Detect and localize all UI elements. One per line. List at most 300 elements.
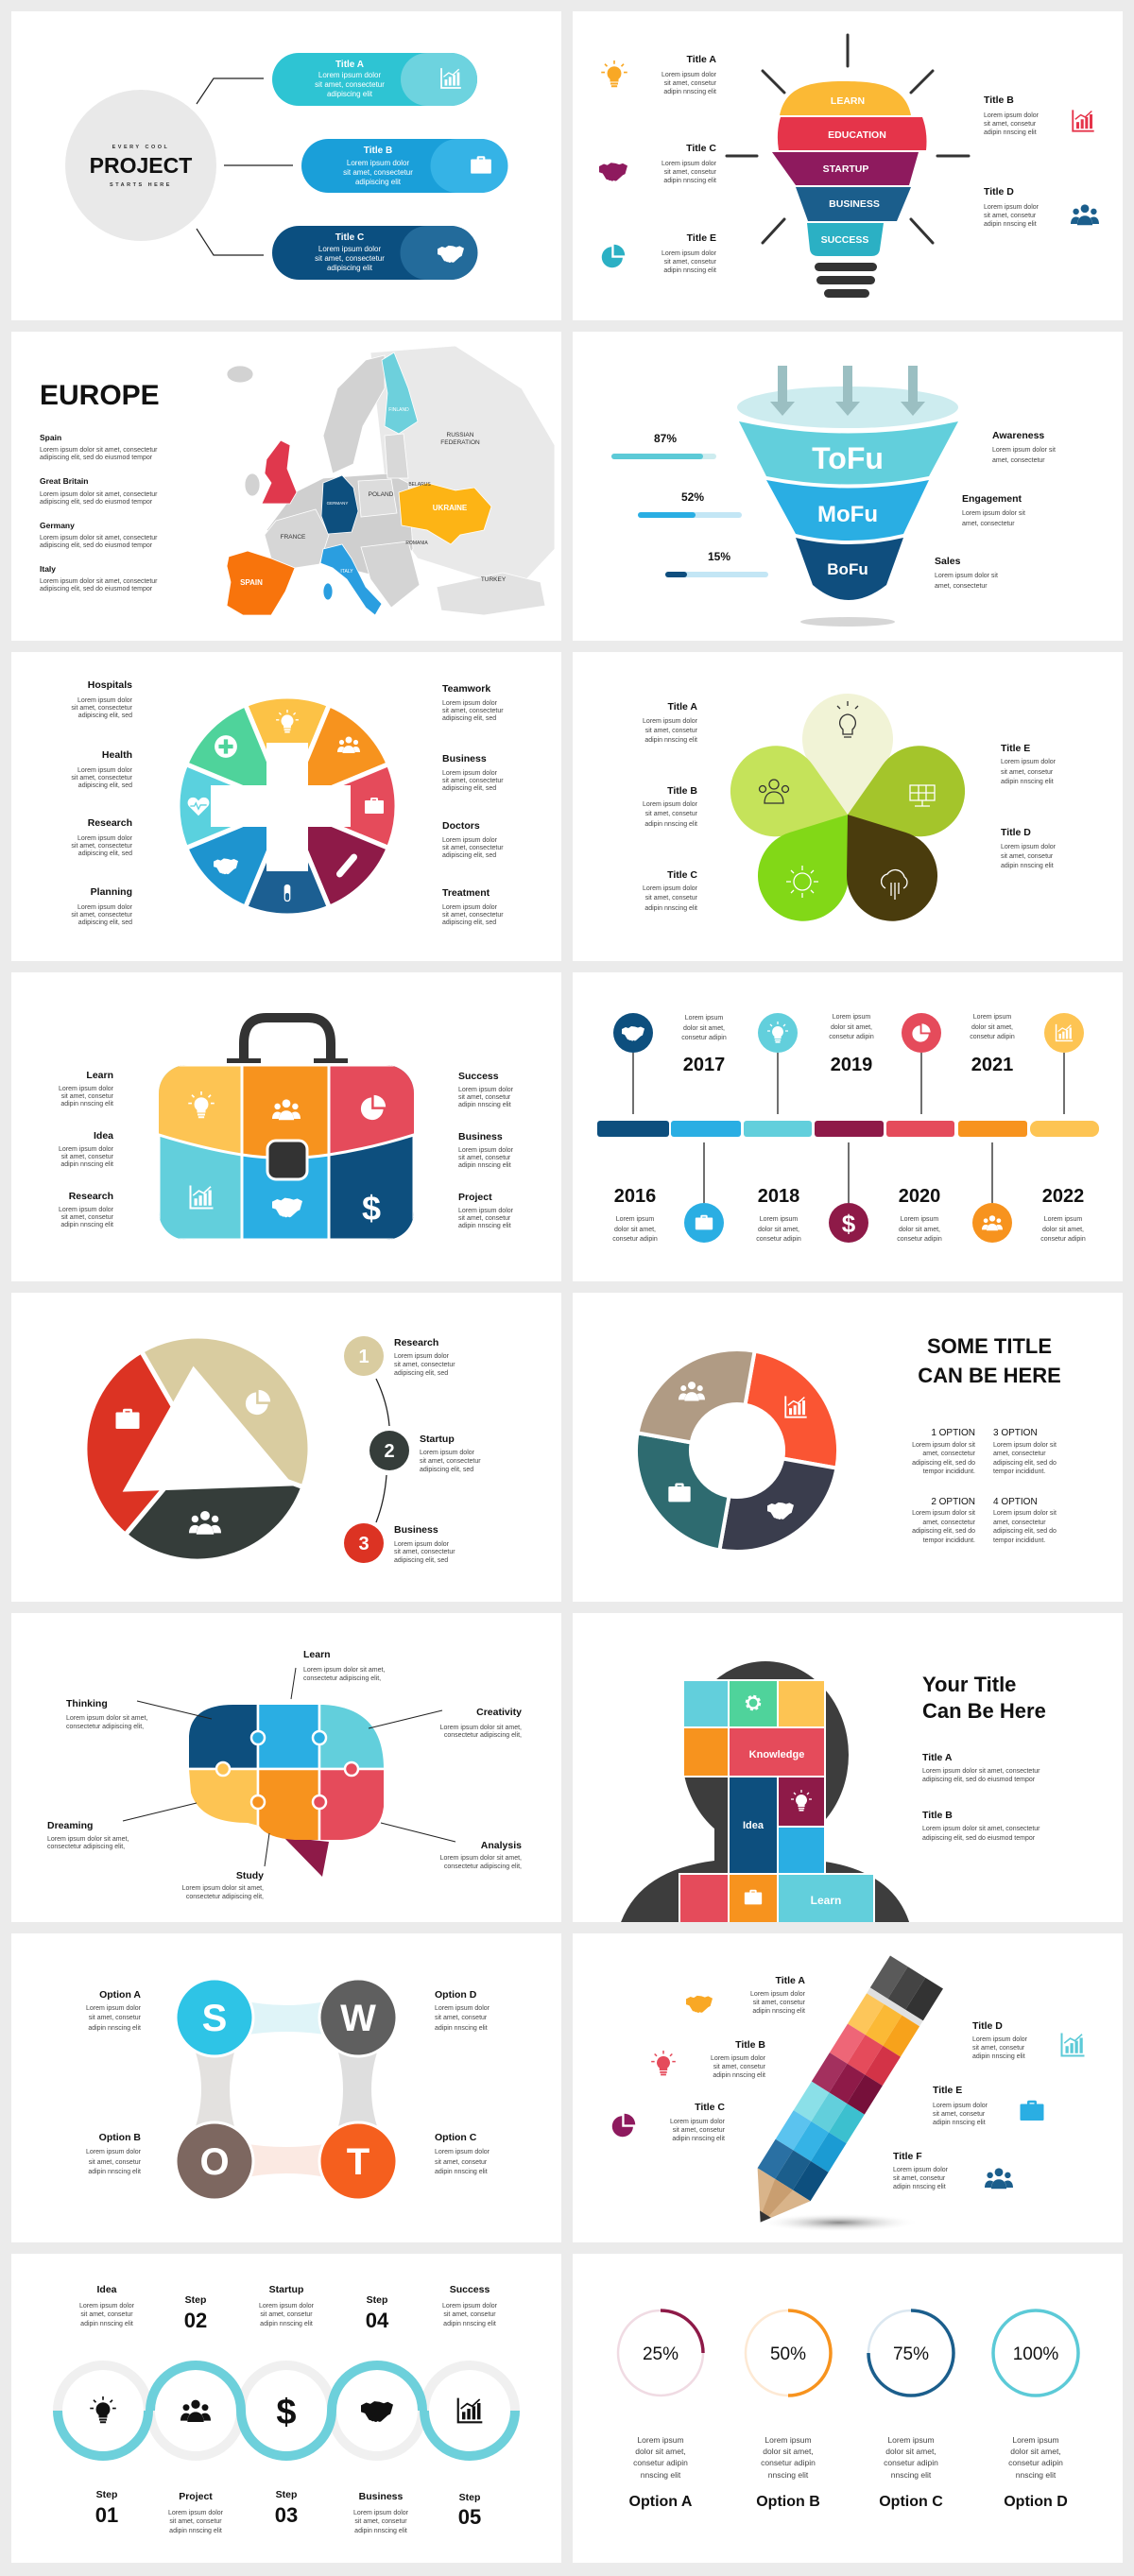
options: tempor incididunt.: [923, 1468, 975, 1475]
right labels: [458, 1071, 514, 1229]
options: amet, consectetur: [993, 1520, 1046, 1526]
options: Lorem ipsum dolor sit: [912, 1510, 975, 1517]
brain labels: Study: [236, 1870, 264, 1881]
timeline bar: [597, 1121, 1099, 1137]
options: amet, consectetur: [922, 1451, 976, 1457]
bottom step texts: 05: [458, 2505, 481, 2529]
option labels: sit amet, consetur: [89, 2015, 142, 2021]
pencil labels right: Title E: [933, 2085, 962, 2096]
option labels: [86, 1989, 490, 2175]
ring captions: Lorem ipsum: [1012, 2435, 1059, 2445]
map labels: ITALY: [340, 569, 353, 575]
right labels: Lorem ipsum dolor: [442, 904, 498, 911]
left labels: sit amet, consetur: [61, 1093, 114, 1100]
right labels: Lorem ipsum dolor: [1001, 759, 1057, 765]
map labels: ROMANIA: [405, 541, 428, 546]
icons: [599, 60, 1099, 267]
ring captions: consetur adipin: [633, 2458, 688, 2467]
pill: Title C: adipiscing elit: [327, 264, 373, 272]
right labels: Lorem ipsum dolor: [458, 1087, 514, 1093]
step labels: adipiscing elit, sed: [394, 1557, 448, 1564]
brain labels: consectetur adipiscing elit,: [303, 1675, 381, 1682]
ToFu: ToFu: [812, 441, 884, 475]
option labels: Lorem ipsum dolor: [435, 2149, 490, 2155]
option labels: adipin nnscing elit: [435, 2025, 488, 2032]
pill: Title A: Title A: [335, 60, 364, 70]
top years: dolor sit amet,: [831, 1024, 872, 1031]
percentage bars: [611, 432, 768, 577]
step rings: [58, 2365, 515, 2456]
puzzle icons and words: Learn: [811, 1894, 841, 1907]
brain labels: Lorem ipsum dolor sit amet,: [303, 1667, 385, 1674]
top step texts: adipin nnscing elit: [443, 2321, 496, 2327]
bottom step texts: 03: [275, 2503, 298, 2527]
options: Lorem ipsum dolor sit: [993, 1442, 1057, 1449]
brain labels: Lorem ipsum dolor sit amet,: [66, 1715, 147, 1722]
bulb layers: EDUCATION: [828, 129, 886, 141]
country text list: adipiscing elit, sed do eiusmod tempor: [40, 455, 153, 461]
pencil labels right: adipin nnscing elit: [972, 2053, 1025, 2060]
brain labels: Analysis: [481, 1840, 522, 1851]
left labels: Lorem ipsum dolor: [59, 1207, 114, 1213]
step labels: Startup: [420, 1434, 455, 1445]
map labels: SPAIN: [240, 578, 263, 587]
BoFu: [796, 538, 903, 600]
top step texts: Lorem ipsum dolor: [259, 2303, 315, 2310]
percentage bars: 52%: [681, 490, 704, 504]
pencil shadow: [759, 2213, 919, 2232]
right labels: Business: [442, 753, 487, 764]
bottom years: dolor sit amet,: [614, 1227, 656, 1233]
left labels: Idea: [94, 1130, 113, 1142]
options: Lorem ipsum dolor sit: [993, 1510, 1057, 1517]
bottom years: consetur adipin: [897, 1236, 942, 1243]
bottom step texts: Step: [276, 2489, 297, 2500]
panel: funnel: [573, 332, 1123, 641]
circle: every cool project: EVERY COOL: [112, 145, 169, 150]
right labels: sit amet, consetur: [458, 1155, 511, 1161]
option titles: Option C: [879, 2494, 943, 2510]
top step texts: sit amet, consetur: [443, 2311, 496, 2318]
title A/B text: Lorem ipsum dolor sit amet, consectetur: [922, 1826, 1040, 1832]
bottom step texts: Business: [359, 2491, 404, 2502]
title A/B text: Title A: [922, 1752, 953, 1763]
step labels: adipiscing elit, sed: [394, 1370, 448, 1377]
ring captions: nnscing elit: [1016, 2470, 1057, 2480]
top step texts: 04: [366, 2309, 389, 2332]
labels right: Lorem ipsum dolor: [984, 112, 1040, 119]
MoFu: [766, 480, 929, 541]
pill: Title C: Lorem ipsum dolor: [318, 245, 381, 253]
pencil labels left: Title A: [775, 1975, 805, 1986]
left labels: Lorem ipsum dolor: [643, 718, 698, 725]
top step texts: adipin nnscing elit: [260, 2321, 313, 2327]
step labels: Lorem ipsum dolor: [394, 1353, 450, 1360]
brain labels: Lorem ipsum dolor sit amet,: [47, 1836, 129, 1843]
panel: timeline: [573, 972, 1123, 1281]
labels left: Lorem ipsum dolor: [662, 72, 717, 78]
bottom years: 2018: [758, 1186, 799, 1207]
funnel labels: Lorem ipsum dolor sit: [935, 573, 998, 579]
pill: Title C: [272, 226, 478, 280]
pill: Title B: adipiscing elit: [355, 178, 402, 186]
SWOT circles: S: [202, 1998, 227, 2039]
pencil labels left: adipin nnscing elit: [713, 2072, 765, 2079]
bulb layers: BUSINESS: [829, 198, 880, 210]
ring icons: [188, 710, 384, 902]
map labels: UKRAINE: [433, 504, 468, 512]
left labels: Title A: [667, 701, 697, 713]
ring captions: Lorem ipsum: [887, 2435, 935, 2445]
ring 50%: 50%: [770, 2344, 806, 2364]
ring 50%: [746, 2310, 831, 2396]
SWOT circles: O: [199, 2141, 230, 2183]
top step texts: sit amet, consetur: [260, 2311, 313, 2318]
puzzle icons and words: Idea: [743, 1820, 765, 1831]
ring 25%: [618, 2310, 703, 2396]
pencil labels left: [670, 1975, 806, 2142]
bottom icon circles: [684, 1203, 1012, 1243]
left labels: Lorem ipsum dolor: [59, 1146, 114, 1153]
funnel shadow: [800, 617, 895, 627]
bottom years: dolor sit amet,: [1042, 1227, 1084, 1233]
left labels: Title B: [667, 785, 697, 797]
title A/B text: Title B: [922, 1810, 953, 1821]
left labels: [71, 679, 133, 926]
pill: Title A: adipiscing elit: [327, 90, 373, 98]
labels left: Title A: [686, 54, 716, 65]
pill: Title A: sit amet, consectetur: [315, 80, 385, 89]
pencil labels left: Lorem ipsum dolor: [750, 1991, 806, 1998]
left labels: Research: [88, 817, 132, 829]
map: [227, 346, 555, 615]
bottom step texts: adipin nnscing elit: [354, 2528, 407, 2534]
pencil labels left: sit amet, consetur: [753, 2000, 806, 2006]
panel: head puzzle: [573, 1613, 1123, 1922]
left labels: Research: [69, 1191, 113, 1202]
stems: [633, 1053, 1064, 1203]
bottom step texts: [95, 2489, 481, 2534]
connectors: [191, 1996, 382, 2183]
number badges: 3: [358, 1534, 369, 1554]
bulb rays: [727, 35, 969, 243]
labels right: [984, 94, 1040, 228]
left labels: sit amet, consetur: [645, 728, 698, 734]
top years: dolor sit amet,: [683, 1025, 725, 1032]
funnel labels: Sales: [935, 556, 961, 567]
bottom years: 2022: [1042, 1186, 1084, 1207]
step labels: sit amet, consectetur: [420, 1458, 481, 1465]
labels right: Title D: [984, 186, 1014, 197]
ring 75%: 75%: [893, 2344, 929, 2364]
ring 100%: [993, 2310, 1078, 2396]
left labels: [643, 701, 698, 912]
bulb layers: SUCCESS: [821, 234, 868, 246]
step labels: Business: [394, 1524, 438, 1536]
labels right: adipin nnscing elit: [984, 129, 1037, 136]
option labels: Option D: [435, 1989, 477, 2001]
bottom icon circles: $: [842, 1210, 856, 1238]
step labels: Lorem ipsum dolor: [420, 1450, 475, 1456]
top years: consetur adipin: [829, 1034, 874, 1040]
pill: Title B: sit amet, consectetur: [343, 168, 413, 177]
bulb layers: LEARN: [831, 95, 865, 107]
MoFu: MoFu: [817, 502, 878, 527]
map labels: FEDERATION: [440, 439, 480, 446]
puzzle pieces: [679, 1680, 874, 1926]
top years: Lorem ipsum: [685, 1015, 723, 1022]
left labels: adipin nnscing elit: [60, 1222, 113, 1228]
left labels: sit amet, consectetur: [71, 912, 133, 919]
ring captions: Lorem ipsum: [765, 2435, 812, 2445]
pencil labels left: Title B: [735, 2039, 765, 2051]
connectors: [197, 78, 293, 255]
panel: SWOT: [11, 1933, 561, 2242]
ring captions: [633, 2435, 1063, 2480]
number badges: 1: [358, 1347, 369, 1367]
brain labels: Dreaming: [47, 1820, 93, 1831]
right labels: Teamwork: [442, 683, 490, 695]
bottom step texts: sit amet, consetur: [354, 2518, 407, 2525]
bottom years: consetur adipin: [612, 1236, 658, 1243]
brain labels: Lorem ipsum dolor sit amet,: [182, 1885, 264, 1892]
left labels: adipin nnscing elit: [60, 1161, 113, 1168]
country text list: [40, 433, 158, 592]
bottom years: dolor sit amet,: [899, 1227, 940, 1233]
left labels: Lorem ipsum dolor: [643, 885, 698, 892]
right labels: adipin nnscing elit: [458, 1223, 511, 1229]
left labels: adipiscing elit, sed: [78, 782, 132, 789]
pencil labels left: Title C: [695, 2102, 725, 2113]
top step texts: Startup: [269, 2284, 303, 2295]
funnel labels: amet, consectetur: [935, 583, 988, 590]
ring captions: dolor sit amet,: [1010, 2447, 1061, 2456]
number badges: [344, 1336, 409, 1563]
bottom years: Lorem ipsum: [760, 1216, 798, 1223]
BoFu: BoFu: [827, 560, 868, 578]
circle: every cool project: STARTS HERE: [110, 182, 172, 188]
right labels: sit amet, consectetur: [442, 912, 504, 919]
brain labels: Lorem ipsum dolor sit amet,: [440, 1725, 522, 1731]
right labels: [1001, 743, 1057, 869]
head silhouette: [620, 1661, 910, 1925]
donut icons: [668, 1382, 807, 1520]
top years: Lorem ipsum: [833, 1014, 870, 1021]
circle: every cool project: [65, 90, 216, 241]
right labels: sit amet, consectetur: [442, 845, 504, 851]
labels left: sit amet, consetur: [664, 80, 717, 87]
map labels: FRANCE: [281, 534, 306, 541]
ring captions: consetur adipin: [761, 2458, 816, 2467]
ring captions: nnscing elit: [768, 2470, 809, 2480]
ring captions: consetur adipin: [884, 2458, 938, 2467]
options: amet, consectetur: [993, 1451, 1046, 1457]
option labels: Option B: [99, 2132, 141, 2143]
petal icons: [760, 701, 935, 900]
labels left: adipin nnscing elit: [663, 178, 716, 184]
ring captions: dolor sit amet,: [763, 2447, 814, 2456]
option labels: adipin nnscing elit: [435, 2169, 488, 2175]
labels left: Lorem ipsum dolor: [662, 161, 717, 167]
panel: medical ring: [11, 652, 561, 961]
country text list: Lorem ipsum dolor sit amet, consectetur: [40, 535, 158, 541]
percentage bars: 87%: [654, 432, 677, 445]
country text list: Germany: [40, 521, 75, 530]
pencil labels right: Title F: [893, 2151, 922, 2162]
pencil labels right: adipin nnscing elit: [933, 2120, 986, 2126]
top step texts: adipin nnscing elit: [80, 2321, 133, 2327]
pencil labels right: Lorem ipsum dolor: [893, 2167, 949, 2173]
bottom step texts: sit amet, consetur: [169, 2518, 222, 2525]
right labels: adipin nnscing elit: [458, 1162, 511, 1169]
labels left: [662, 54, 717, 274]
left labels: sit amet, consetur: [61, 1154, 114, 1160]
options: adipiscing elit, sed do: [912, 1528, 975, 1535]
right labels: adipin nnscing elit: [458, 1102, 511, 1108]
title A/B text: adipiscing elit, sed do eiusmod tempor: [922, 1835, 1036, 1842]
left labels: adipiscing elit, sed: [78, 713, 132, 719]
brain labels: Learn: [303, 1649, 331, 1660]
country text list: Spain: [40, 433, 61, 442]
title: [918, 1334, 1061, 1387]
panel: pencil: [573, 1933, 1123, 2242]
funnel labels: Lorem ipsum dolor sit: [992, 447, 1056, 454]
step labels: [394, 1337, 481, 1564]
options: 4 OPTION: [993, 1497, 1038, 1507]
country text list: Italy: [40, 564, 56, 574]
panel: project title pills: [11, 11, 561, 320]
pencil labels left: adipin nnscing elit: [672, 2136, 725, 2142]
pencil icons: [612, 1996, 1085, 2189]
country text list: adipiscing elit, sed do eiusmod tempor: [40, 586, 153, 592]
bottom years: 2016: [614, 1186, 656, 1207]
left labels: sit amet, consetur: [61, 1214, 114, 1221]
top step texts: Step: [367, 2294, 387, 2306]
option titles: Option A: [629, 2494, 693, 2510]
left labels: Title C: [667, 869, 697, 881]
left labels: Planning: [91, 886, 132, 898]
bulb layers: STARTUP: [823, 163, 868, 175]
option labels: sit amet, consetur: [435, 2015, 488, 2021]
pill: Title B: [301, 139, 508, 193]
title A/B text: adipiscing elit, sed do eiusmod tempor: [922, 1777, 1036, 1783]
right labels: sit amet, consectetur: [442, 708, 504, 714]
lock: [267, 1141, 307, 1179]
pencil labels left: Lorem ipsum dolor: [670, 2119, 726, 2125]
pencil labels right: sit amet, consetur: [893, 2175, 946, 2182]
map labels: FINLAND: [388, 407, 409, 413]
bottom years: Lorem ipsum: [1044, 1216, 1082, 1223]
bottom years: Lorem ipsum: [616, 1216, 654, 1223]
top icon circles: [613, 1013, 1084, 1053]
top step texts: Lorem ipsum dolor: [79, 2303, 135, 2310]
left labels: adipiscing elit, sed: [78, 919, 132, 926]
labels left: Title C: [686, 143, 716, 154]
top step texts: sit amet, consetur: [80, 2311, 133, 2318]
pill: Title B: Lorem ipsum dolor: [347, 159, 409, 167]
option labels: Lorem ipsum dolor: [435, 2005, 490, 2012]
step icons: [90, 2393, 482, 2432]
panel: Europe map: [11, 332, 561, 641]
pencil labels right: Title D: [972, 2020, 1003, 2032]
panel: three-part cycle: [11, 1293, 561, 1602]
pencil labels left: adipin nnscing elit: [752, 2008, 805, 2015]
ToFu: [739, 421, 958, 484]
pencil labels left: sit amet, consetur: [673, 2127, 726, 2134]
top step texts: Step: [185, 2294, 206, 2306]
ring captions: Lorem ipsum: [637, 2435, 684, 2445]
funnel labels: amet, consectetur: [962, 521, 1015, 527]
title A/B text: Lorem ipsum dolor sit amet, consectetur: [922, 1768, 1040, 1775]
left labels: Lorem ipsum dolor: [643, 801, 698, 808]
right labels: sit amet, consectetur: [442, 778, 504, 784]
option titles: Option D: [1004, 2494, 1068, 2510]
brain labels: Thinking: [66, 1698, 108, 1709]
left labels: Lorem ipsum dolor: [77, 904, 133, 911]
circle: every cool project: PROJECT: [90, 153, 192, 178]
connector arc: [376, 1379, 389, 1522]
pill: Title A: [272, 53, 477, 106]
labels left: adipin nnscing elit: [663, 267, 716, 274]
panel: briefcase: [11, 972, 561, 1281]
map labels: BELARUS: [408, 482, 431, 488]
map labels: [240, 407, 507, 587]
option labels: sit amet, consetur: [435, 2159, 488, 2166]
ring 25%: 25%: [643, 2344, 679, 2364]
left labels: sit amet, consectetur: [71, 705, 133, 712]
petals: [718, 694, 977, 939]
options: Lorem ipsum dolor sit: [912, 1442, 975, 1449]
title: SOME TITLE: [927, 1334, 1052, 1358]
title: CAN BE HERE: [918, 1364, 1061, 1387]
left labels: Health: [102, 749, 132, 761]
bottom step texts: adipin nnscing elit: [169, 2528, 222, 2534]
puzzle icons and words: [743, 1697, 841, 1907]
left labels: adipin nnscing elit: [60, 1101, 113, 1108]
left labels: adipin nnscing elit: [644, 821, 697, 828]
right labels: Lorem ipsum dolor: [1001, 844, 1057, 850]
pencil labels left: sit amet, consetur: [713, 2064, 766, 2070]
options: tempor incididunt.: [993, 1537, 1045, 1544]
top years: consetur adipin: [970, 1034, 1015, 1040]
labels right: Lorem ipsum dolor: [984, 204, 1040, 211]
left labels: sit amet, consetur: [645, 895, 698, 902]
white cross center: [211, 743, 351, 871]
pencil labels right: sit amet, consetur: [972, 2045, 1025, 2052]
labels left: Title E: [687, 232, 716, 244]
brain labels: consectetur adipiscing elit,: [186, 1894, 264, 1900]
right labels: Lorem ipsum dolor: [442, 700, 498, 707]
bottom step texts: Lorem ipsum dolor: [353, 2510, 409, 2516]
pill: Title C: sit amet, consectetur: [315, 254, 385, 263]
pencil labels left: Lorem ipsum dolor: [711, 2055, 766, 2062]
SWOT circles: T: [347, 2141, 369, 2183]
right labels: Business: [458, 1131, 503, 1142]
left labels: Lorem ipsum dolor: [59, 1086, 114, 1092]
options: 3 OPTION: [993, 1428, 1038, 1438]
ring captions: consetur adipin: [1008, 2458, 1063, 2467]
bottom step texts: 01: [95, 2503, 118, 2527]
brain labels: Lorem ipsum dolor sit amet,: [440, 1855, 522, 1862]
options: adipiscing elit, sed do: [993, 1528, 1057, 1535]
options: adipiscing elit, sed do: [912, 1460, 975, 1467]
step labels: Research: [394, 1337, 438, 1348]
right labels: sit amet, consetur: [1001, 769, 1054, 776]
title: [922, 1673, 1046, 1723]
step icons: $: [276, 2393, 297, 2432]
right labels: Lorem ipsum dolor: [442, 770, 498, 777]
right labels: adipiscing elit, sed: [442, 785, 496, 792]
